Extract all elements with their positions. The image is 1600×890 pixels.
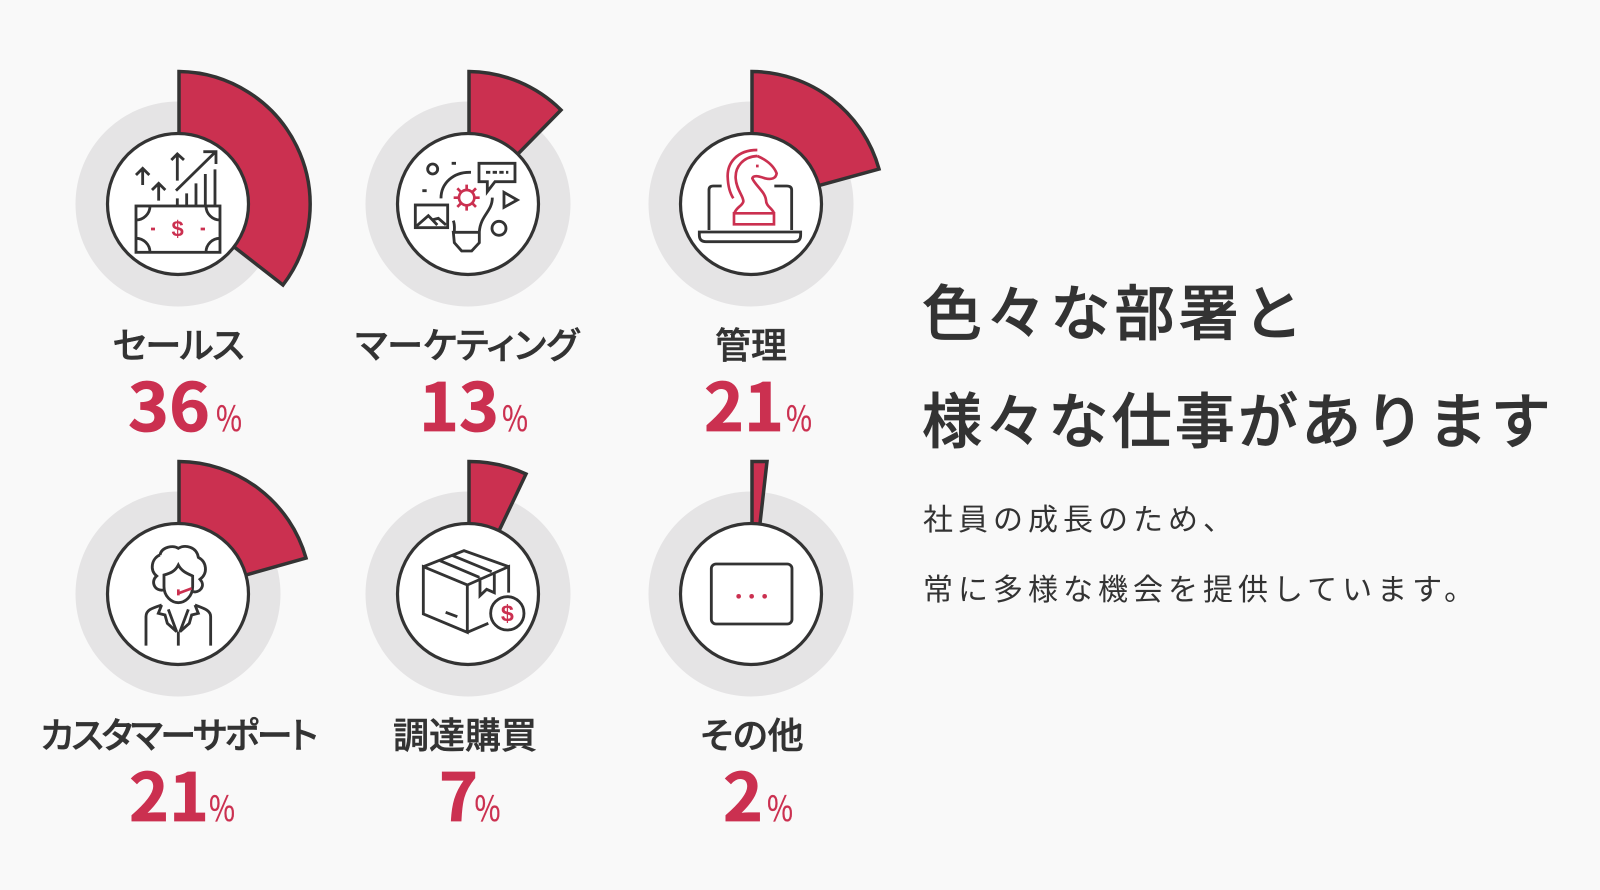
icon: money and growth arrows (136, 152, 220, 252)
panel: management 21% (648, 72, 879, 451)
description text (923, 495, 1479, 609)
panel: purchasing 7% (366, 461, 570, 841)
panel: marketing 13% (355, 72, 581, 451)
label: management: 管理 (715, 317, 787, 369)
panel: sales 36% (76, 72, 310, 451)
donut: purchasing (366, 461, 570, 696)
icon: money and growth arrows: $ (172, 217, 184, 242)
title (922, 266, 1554, 461)
icon: chess knight on laptop (699, 150, 801, 242)
label: customer support: カスタマーサポート (40, 707, 316, 759)
value: 7%: % (474, 781, 500, 832)
panel: other 2% (648, 462, 854, 841)
title: 色々な部署と (922, 266, 1307, 353)
icon: support operator (146, 546, 211, 646)
icon: ellipsis box (711, 564, 792, 624)
icon: parcel with dollar: $ (501, 601, 514, 627)
value: 21%: 21 (704, 355, 784, 451)
label: purchasing: 調達購買 (393, 707, 537, 759)
value: 2% (723, 745, 793, 841)
value: 21%: 21 (129, 745, 209, 841)
icon: parcel with dollar (423, 551, 524, 632)
value: 36% (128, 355, 242, 451)
value: 21%: % (209, 781, 235, 832)
value: 2%: % (767, 781, 793, 832)
description text: 常に多様な機会を提供しています。 (923, 565, 1479, 609)
icon: idea bulb and media (415, 163, 517, 251)
donut: marketing (366, 72, 570, 306)
donut: other (648, 462, 854, 696)
value: 7% (439, 745, 500, 841)
panel: customer support 21% (40, 462, 316, 841)
donut: management (648, 72, 879, 306)
value: 7%: 7 (439, 745, 478, 841)
label: other: その他 (700, 707, 804, 759)
value: 13%: % (502, 391, 528, 442)
value: 2%: 2 (723, 745, 763, 841)
value: 36%: 36 (128, 355, 210, 451)
title: 様々な仕事があります (922, 374, 1554, 461)
value: 13%: 13 (419, 355, 499, 451)
description text: 社員の成長のため、 (923, 495, 1238, 539)
donut: customer support (76, 462, 306, 696)
donut: sales (76, 72, 310, 306)
label: sales: セールス (113, 317, 243, 369)
value: 36%: % (216, 391, 242, 442)
value: 21%: % (786, 391, 812, 442)
label: marketing: マーケティング (355, 317, 581, 369)
